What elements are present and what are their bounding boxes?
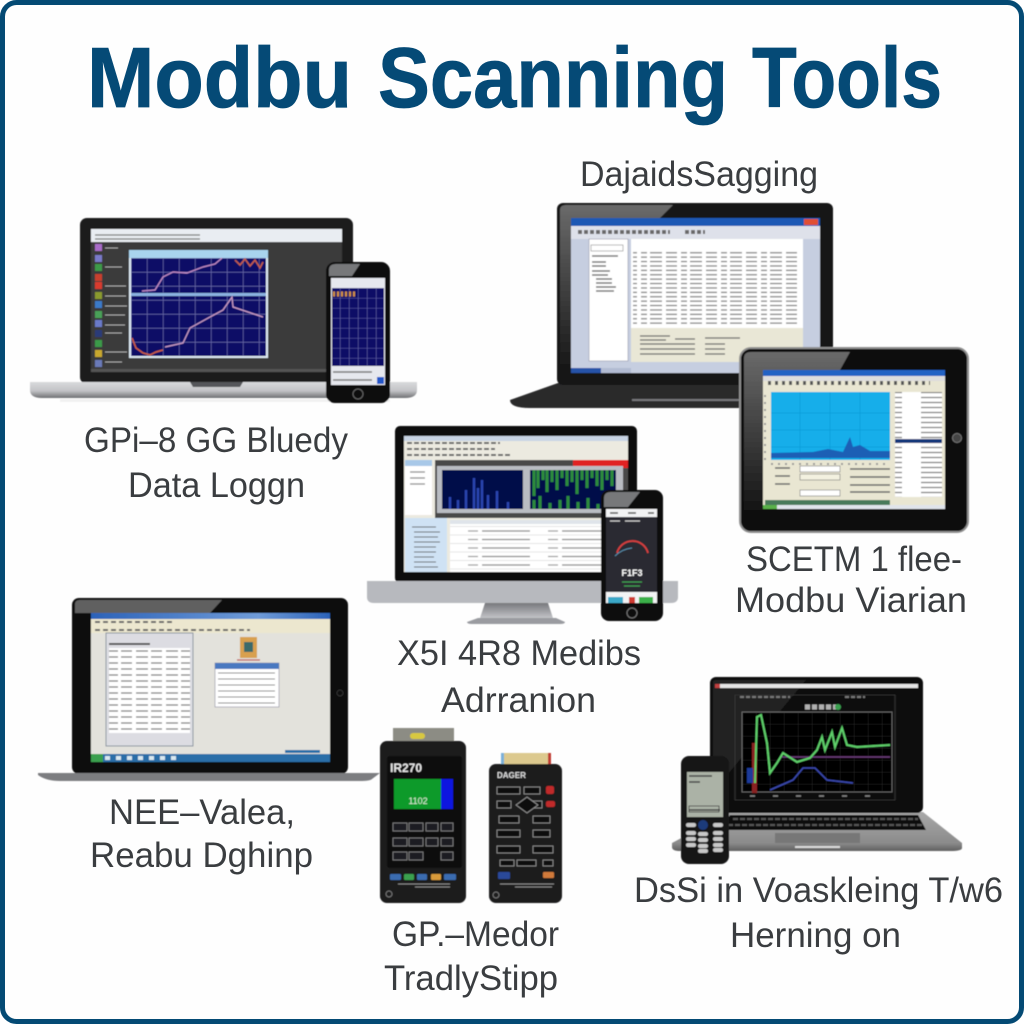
laptop lid	[710, 677, 923, 813]
label: lower left	[90, 793, 313, 875]
header text: IR270	[390, 761, 422, 775]
label: centre monitor: Adrranion	[441, 681, 596, 720]
label: lower left: Reabu Dghinp	[90, 836, 313, 875]
label: right tablet: Modbu Viarian	[735, 581, 967, 620]
phone: F1F3	[621, 568, 643, 578]
laptop base	[38, 773, 380, 781]
label: right tablet: SCETM 1 flee-	[746, 540, 962, 579]
label: right tablet	[735, 540, 967, 620]
device: handheld scanner, left	[380, 728, 466, 903]
device: handheld scanner, right	[489, 753, 562, 903]
label: centre monitor: X5I 4R8 Medibs	[397, 634, 641, 673]
device group: laptop and mobile, lower right	[672, 677, 962, 864]
tablet	[740, 348, 968, 532]
label: lower right	[634, 871, 1003, 955]
label: lower right: DsSi in Voaskleing T/w6	[634, 871, 1003, 910]
connector	[501, 753, 551, 765]
device: laptop, lower left	[38, 598, 380, 781]
label: top centre-right heading: DajaidsSagging	[580, 155, 818, 194]
title: Modbu	[87, 31, 352, 126]
title	[87, 31, 942, 126]
coloured buttons	[386, 874, 456, 897]
laptop body	[72, 598, 348, 774]
label: lower centre: GP.–Medor	[392, 915, 559, 954]
monitor chin	[367, 581, 678, 603]
keypad	[393, 823, 453, 860]
chart window	[129, 250, 268, 358]
laptop screen	[91, 229, 342, 372]
label: lower left: NEE–Valea,	[109, 793, 295, 832]
phone	[601, 490, 663, 621]
label: top left: GPi–8 GG Bluedy	[84, 421, 348, 460]
device group: laptop and tablet, top right	[510, 203, 968, 532]
device group: desktop monitor and phone, centre	[367, 426, 678, 624]
laptop base	[30, 382, 417, 402]
monitor screen	[404, 436, 628, 572]
label: top left: Data Loggn	[128, 466, 305, 505]
connector	[393, 728, 454, 742]
laptop body	[557, 203, 833, 385]
LCD screen: 1102	[408, 796, 428, 806]
LCD screen	[394, 779, 453, 809]
laptop body	[80, 218, 353, 384]
laptop screen	[571, 218, 820, 373]
monitor stand	[467, 603, 565, 624]
body	[380, 741, 466, 903]
label: lower right: Herning on	[730, 916, 901, 955]
label: top left	[84, 421, 348, 505]
laptop base	[510, 383, 760, 408]
laptop deck	[672, 812, 962, 851]
keypad	[497, 786, 555, 866]
label: lower centre: TradlyStipp	[384, 959, 558, 998]
header text: DAGER	[497, 771, 526, 780]
face panel	[387, 756, 462, 868]
laptop screen	[91, 613, 330, 762]
monitor bezel	[395, 426, 637, 583]
line chart	[735, 695, 895, 800]
device group: laptop and phone, top left	[30, 218, 417, 403]
phone	[326, 262, 390, 403]
title: Scanning	[378, 31, 728, 126]
mobile phone	[681, 756, 729, 864]
label: centre monitor	[397, 634, 641, 720]
body	[489, 764, 562, 903]
title: Tools	[752, 31, 942, 126]
coloured buttons	[493, 872, 554, 898]
label: lower centre	[384, 915, 559, 998]
